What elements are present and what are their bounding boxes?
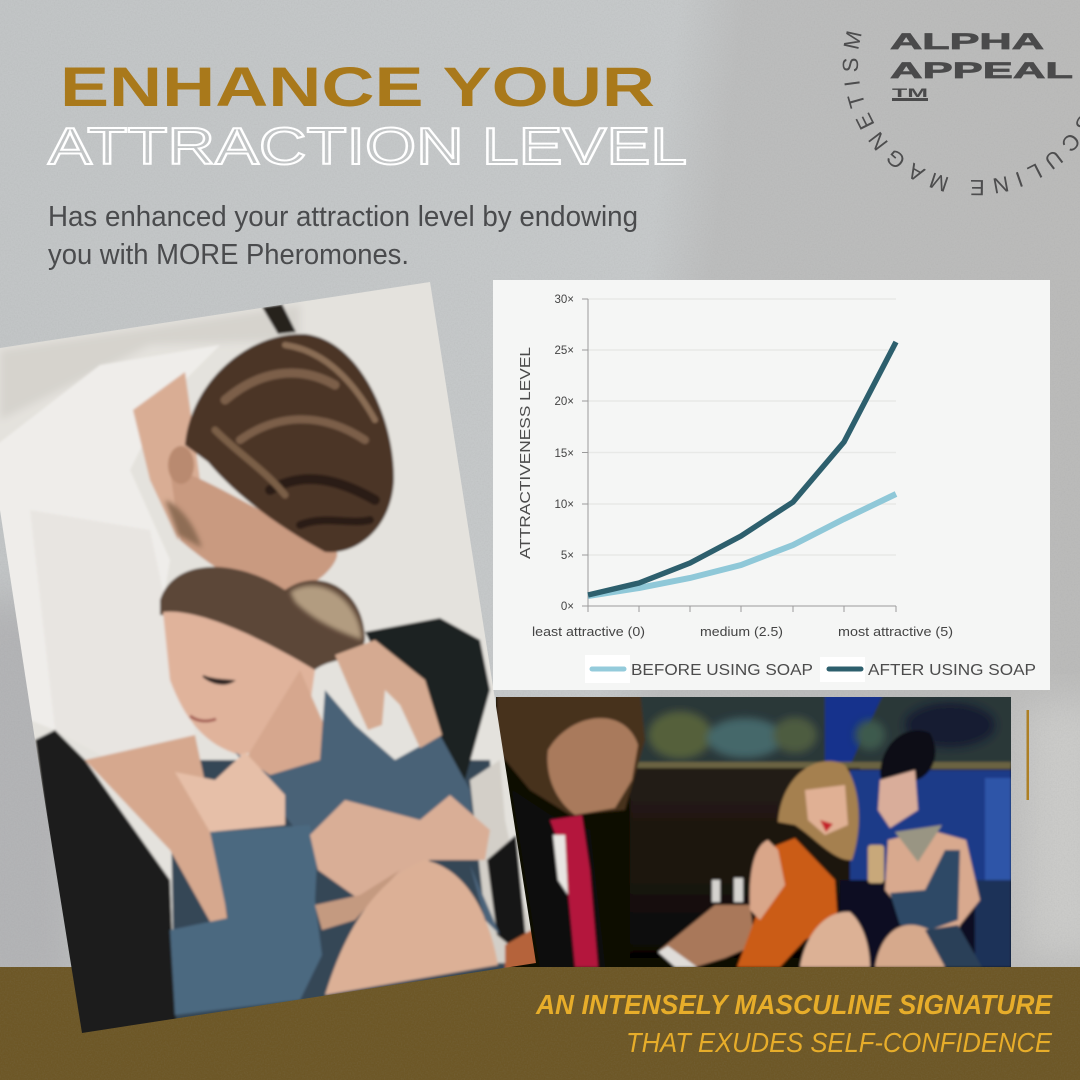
man's hair (185, 334, 394, 552)
y axis labels: 30× (554, 294, 574, 306)
gold accent bar (1026, 710, 1029, 800)
legend (585, 655, 1036, 683)
intro text block (48, 201, 638, 271)
chart axes (582, 299, 896, 612)
line: before using soap (588, 494, 896, 596)
banner text: THAT EXUDES SELF-CONFIDENCE (626, 1027, 1053, 1058)
intro text block: Has enhanced your attraction level by endowing (48, 201, 638, 233)
x axis labels: least attractive (0) (532, 625, 645, 639)
panel: attractiveness chart (493, 280, 1050, 690)
legend: AFTER USING SOAP (868, 662, 1036, 679)
y axis labels (554, 294, 574, 613)
banner text: AN INTENSELY MASCULINE SIGNATURE (535, 989, 1054, 1020)
legend: BEFORE USING SOAP (631, 662, 813, 679)
logo: alpha appeal: ALPHA (890, 29, 1044, 54)
x axis labels: medium (2.5) (700, 625, 783, 639)
logo: alpha appeal: APPEAL (890, 58, 1073, 83)
photo: embracing couple (0, 270, 550, 1050)
y axis title: ATTRACTIVENESS LEVEL (517, 347, 534, 559)
y axis labels: 10× (554, 499, 574, 511)
banner text (535, 989, 1054, 1058)
y axis labels: 5× (561, 550, 574, 562)
photo: bar scene (490, 690, 1020, 975)
y axis labels: 25× (554, 345, 574, 357)
intro text block: you with MORE Pheromones. (48, 239, 409, 271)
x axis labels: most attractive (5) (838, 625, 953, 639)
y axis labels: 15× (554, 448, 574, 460)
title: enhance your: ENHANCE YOUR (60, 55, 655, 118)
line: after using soap (588, 342, 896, 595)
y axis labels: 20× (554, 396, 574, 408)
title: attraction level outline: ATTRACTION LEVEL (48, 118, 687, 176)
bottom banner (0, 967, 1080, 1080)
y axis labels: 0× (561, 601, 574, 613)
x axis labels (532, 625, 953, 639)
logo: alpha appeal: TM (892, 86, 928, 100)
